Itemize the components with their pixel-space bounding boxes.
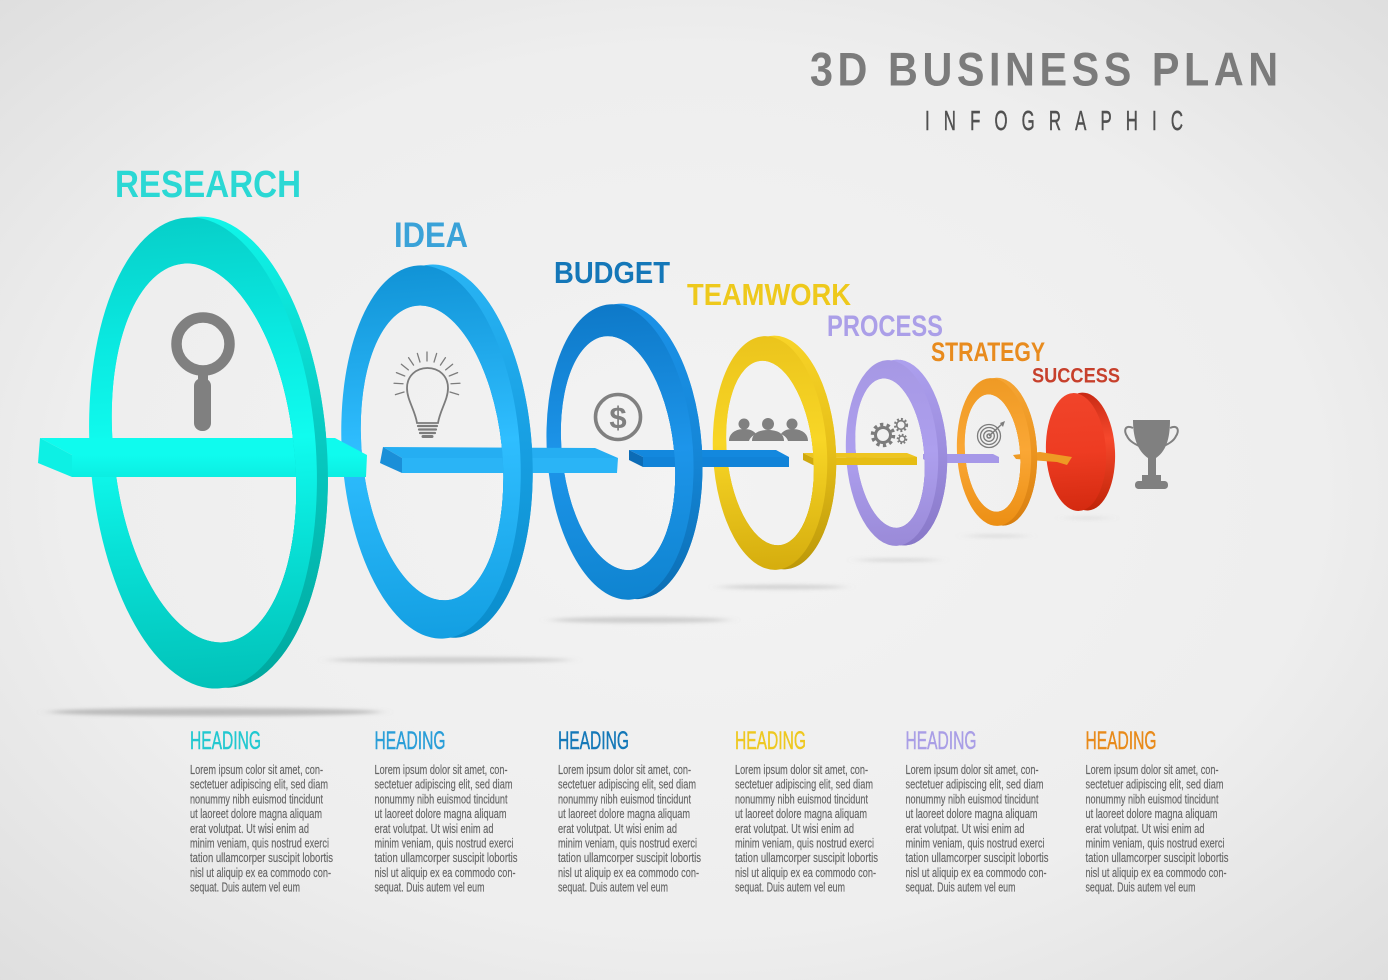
body text: sectetuer adipiscing elit, sed diam	[558, 778, 696, 792]
body text: sectetuer adipiscing elit, sed diam	[190, 778, 328, 792]
body text: sequat. Duis autem vel eum	[735, 881, 845, 895]
ring: strategy (orange)	[953, 376, 1041, 528]
column: process text	[906, 727, 1048, 895]
body text: tation ullamcorper suscipit lobortis	[906, 851, 1048, 865]
body text: tation ullamcorper suscipit lobortis	[1086, 851, 1228, 865]
column: strategy text	[1086, 727, 1228, 895]
bar: research	[38, 438, 367, 477]
body text: Lorem ipsum color sit amet, con-	[190, 763, 323, 777]
bar: teamwork	[803, 453, 917, 465]
ring right arms in front of bars	[74, 209, 1041, 696]
body text: minim veniam, quis nostrud exerci	[1086, 836, 1224, 850]
body text: nisl ut aliquip ex ea commodo con-	[374, 866, 516, 880]
body text: ut laoreet dolore magna aliquam	[735, 807, 867, 821]
icon: dollar coin: $	[609, 400, 627, 435]
body text: ut laoreet dolore magna aliquam	[906, 807, 1038, 821]
ring: process (purple)	[841, 357, 952, 548]
bar: strategy arrow	[1013, 452, 1072, 465]
body text: ut laoreet dolore magna aliquam	[1086, 807, 1218, 821]
label: research: RESEARCH	[115, 164, 301, 206]
label: success: SUCCESS	[1032, 364, 1120, 388]
column: budget text	[558, 727, 701, 895]
body text: tation ullamcorper suscipit lobortis	[735, 851, 878, 865]
icon: team of people	[729, 418, 808, 441]
disk: success (red)	[1043, 391, 1118, 512]
body text: Lorem ipsum dolor sit amet, con-	[906, 763, 1038, 777]
heading: HEADING	[735, 727, 806, 755]
body text: Lorem ipsum dolor sit amet, con-	[735, 763, 868, 777]
body text: nisl ut aliquip ex ea commodo con-	[558, 866, 699, 880]
column: research text	[190, 727, 333, 895]
main heading: 3D BUSINESS PLAN	[810, 44, 1278, 96]
body text: minim veniam, quis nostrud exerci	[190, 836, 329, 850]
column: idea text	[374, 727, 518, 895]
body text: erat volutpat. Ut wisi enim ad	[190, 822, 309, 836]
body text: minim veniam, quis nostrud exerci	[558, 836, 697, 850]
body text	[906, 763, 1048, 895]
body text: ut laoreet dolore magna aliquam	[374, 807, 506, 821]
body text: Lorem ipsum dolor sit amet, con-	[1086, 763, 1218, 777]
label: budget: BUDGET	[554, 255, 670, 290]
icon: gears	[872, 419, 907, 446]
icon: magnifying glass	[176, 318, 230, 431]
body text: sectetuer adipiscing elit, sed diam	[374, 778, 512, 792]
body text: tation ullamcorper suscipit lobortis	[190, 851, 333, 865]
body text: nisl ut aliquip ex ea commodo con-	[190, 866, 331, 880]
step labels	[115, 164, 1120, 388]
body text: sectetuer adipiscing elit, sed diam	[735, 778, 873, 792]
body text	[190, 763, 333, 895]
body text	[1086, 763, 1228, 895]
bar: idea	[380, 447, 618, 473]
heading: HEADING	[190, 727, 261, 755]
column: teamwork text	[735, 727, 878, 895]
body text: Lorem ipsum dolor sit amet, con-	[558, 763, 691, 777]
body text: sequat. Duis autem vel eum	[1086, 881, 1196, 895]
ring: budget (dark blue)	[537, 299, 712, 605]
body text	[735, 763, 878, 895]
label: idea: IDEA	[394, 216, 468, 255]
ring: teamwork (yellow)	[707, 333, 842, 573]
ring: research (teal)	[74, 209, 343, 696]
body text: erat volutpat. Ut wisi enim ad	[735, 822, 854, 836]
body text: minim veniam, quis nostrud exerci	[906, 836, 1044, 850]
label: teamwork: TEAMWORK	[687, 277, 852, 312]
body text: nonummy nibh euismod tincidunt	[1086, 792, 1219, 806]
body text: erat volutpat. Ut wisi enim ad	[374, 822, 494, 836]
ring: idea (blue)	[329, 258, 545, 645]
body text: nonummy nibh euismod tincidunt	[906, 792, 1039, 806]
icon: dollar coin	[596, 394, 640, 440]
icon: target with arrow	[978, 421, 1005, 448]
body text: ut laoreet dolore magna aliquam	[190, 807, 322, 821]
body text: sequat. Duis autem vel eum	[374, 881, 484, 895]
body text: tation ullamcorper suscipit lobortis	[558, 851, 701, 865]
title	[810, 44, 1278, 136]
bar: process	[923, 454, 999, 463]
subheading: INFOGRAPHIC	[925, 105, 1183, 136]
heading: HEADING	[1086, 727, 1156, 755]
body text: sequat. Duis autem vel eum	[906, 881, 1016, 895]
body text	[374, 763, 518, 895]
body text: erat volutpat. Ut wisi enim ad	[558, 822, 677, 836]
body text: erat volutpat. Ut wisi enim ad	[1086, 822, 1205, 836]
label: process: PROCESS	[827, 310, 943, 343]
body text: minim veniam, quis nostrud exerci	[735, 836, 874, 850]
body text: nonummy nibh euismod tincidunt	[374, 792, 508, 806]
icon: trophy	[1125, 420, 1178, 489]
body text: nisl ut aliquip ex ea commodo con-	[735, 866, 876, 880]
body text	[558, 763, 701, 895]
body text: ut laoreet dolore magna aliquam	[558, 807, 690, 821]
heading: HEADING	[374, 727, 446, 755]
body text: nonummy nibh euismod tincidunt	[190, 792, 323, 806]
icon: light bulb	[394, 352, 460, 436]
body text: tation ullamcorper suscipit lobortis	[374, 851, 518, 865]
floor shadows	[50, 517, 1109, 716]
body text: nonummy nibh euismod tincidunt	[558, 792, 691, 806]
heading: HEADING	[558, 727, 629, 755]
body text: sectetuer adipiscing elit, sed diam	[906, 778, 1044, 792]
body text: sequat. Duis autem vel eum	[190, 881, 300, 895]
body text: nonummy nibh euismod tincidunt	[735, 792, 868, 806]
bar: budget	[629, 450, 789, 467]
body text: erat volutpat. Ut wisi enim ad	[906, 822, 1025, 836]
body text: sectetuer adipiscing elit, sed diam	[1086, 778, 1224, 792]
body text: minim veniam, quis nostrud exerci	[374, 836, 514, 850]
heading: HEADING	[906, 727, 976, 755]
label: strategy: STRATEGY	[931, 337, 1045, 367]
body text: nisl ut aliquip ex ea commodo con-	[1086, 866, 1226, 880]
body text: sequat. Duis autem vel eum	[558, 881, 668, 895]
body text: nisl ut aliquip ex ea commodo con-	[906, 866, 1046, 880]
body text: Lorem ipsum dolor sit amet, con-	[374, 763, 508, 777]
